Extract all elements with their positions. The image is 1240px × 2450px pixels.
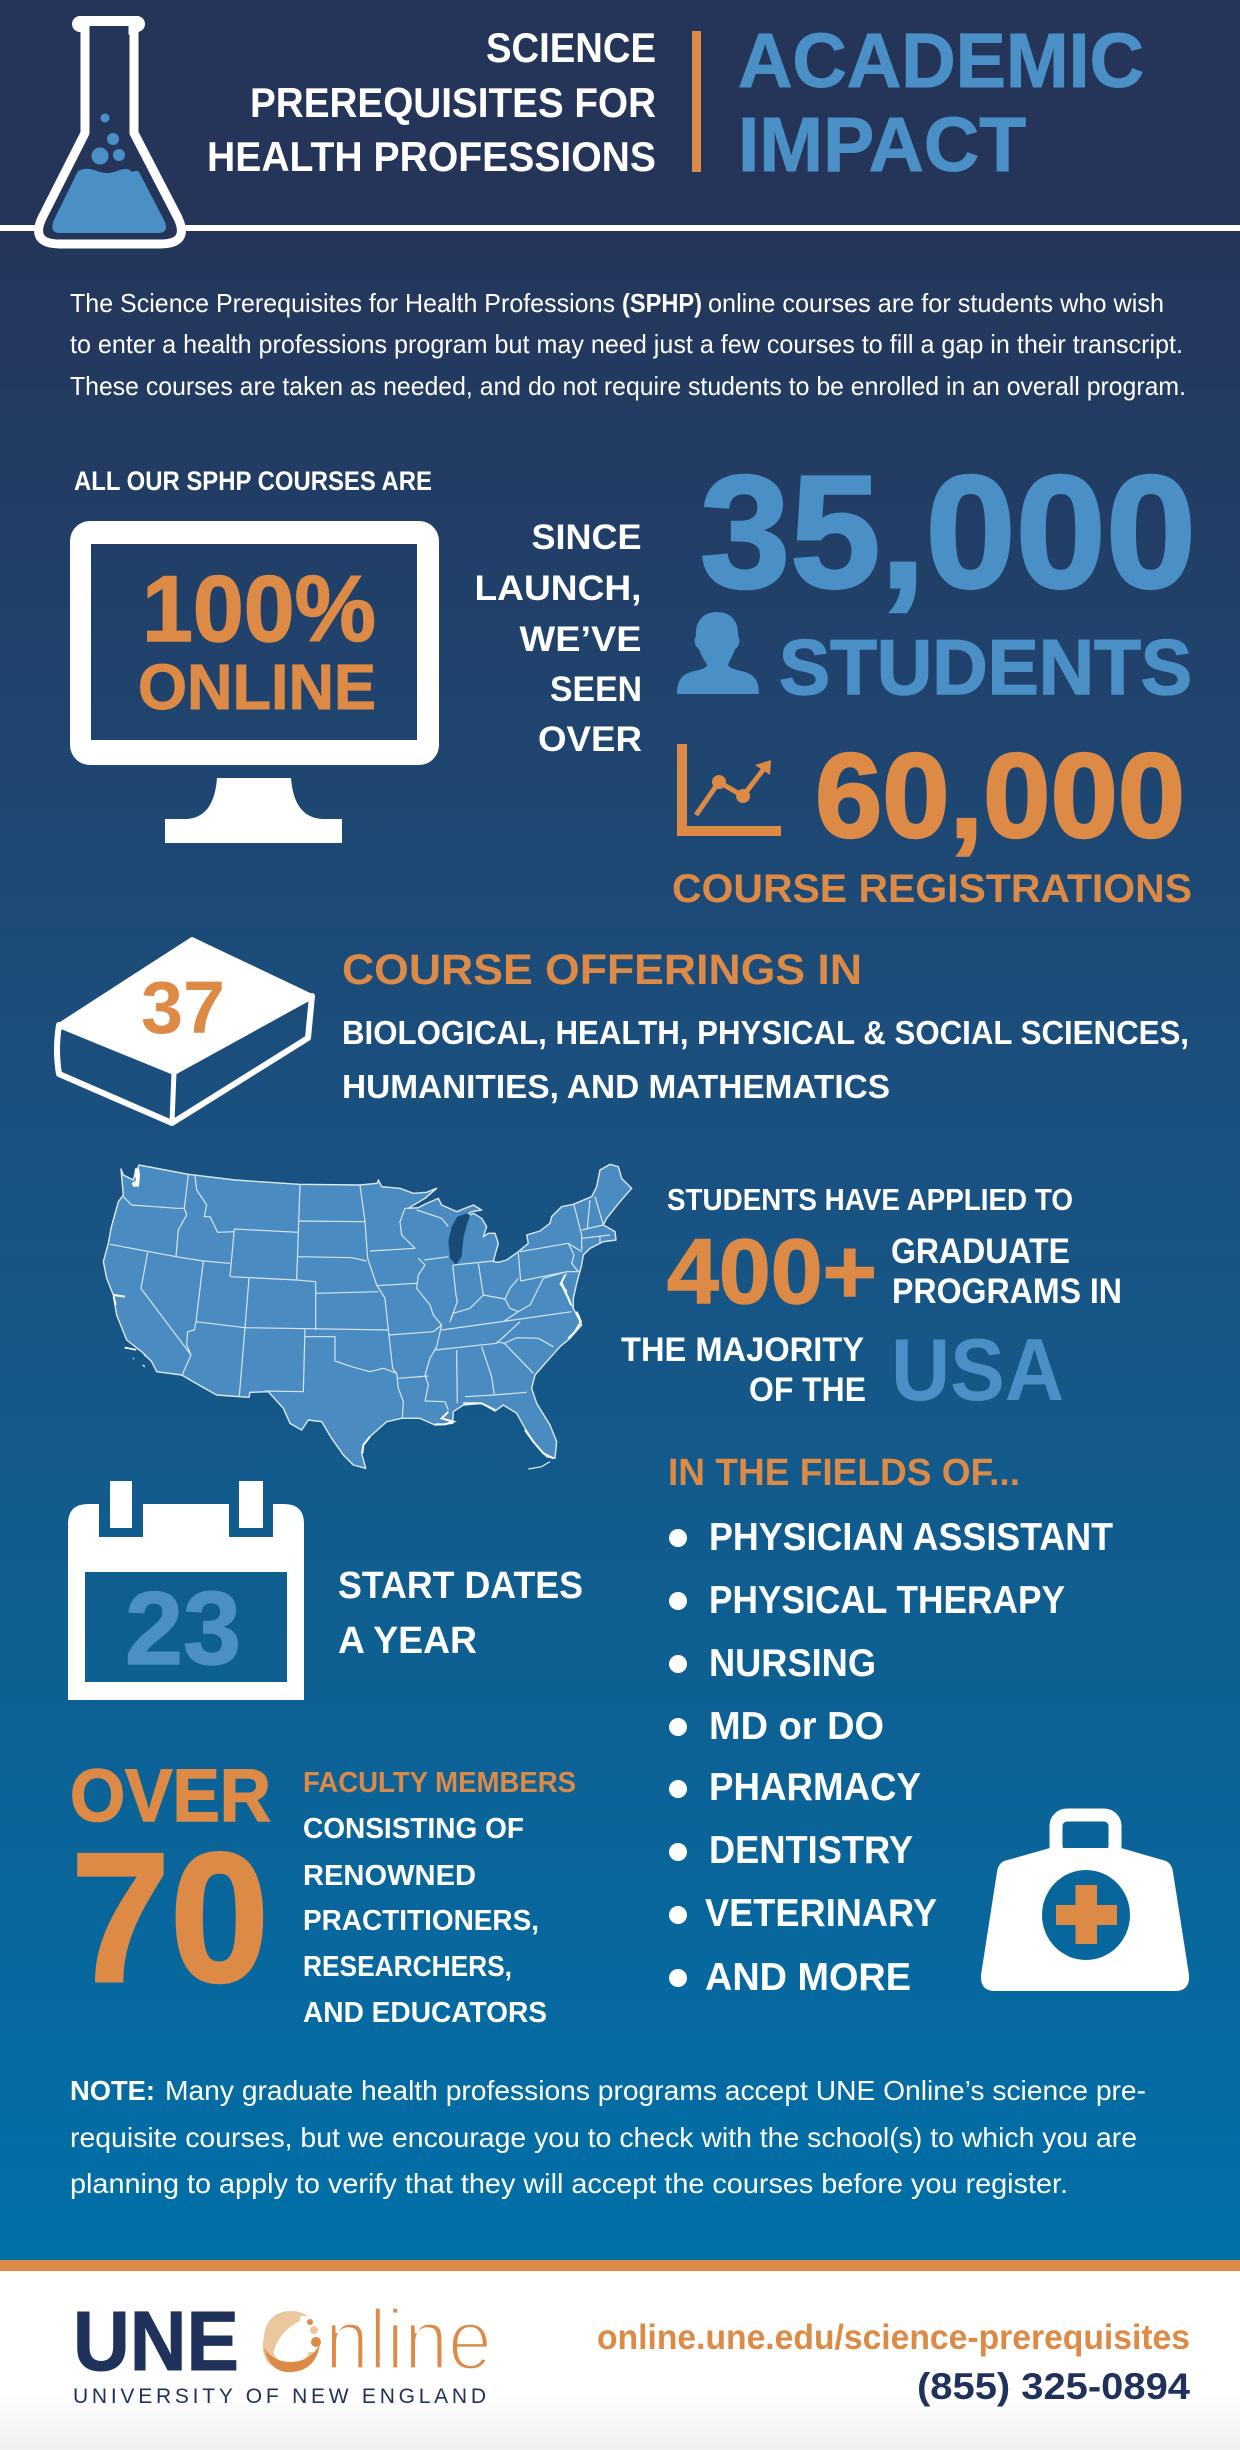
icon: line chart <box>677 744 781 836</box>
panel: graduate programs: OF THE <box>749 1371 866 1409</box>
list of fields: PHYSICAL THERAPY <box>709 1579 1065 1622</box>
panel: course offerings: HUMANITIES, AND MATHEMATICS <box>342 1068 890 1105</box>
list of fields: VETERINARY <box>705 1892 937 1935</box>
text: since launch we've seen over: LAUNCH, <box>474 569 642 608</box>
note text block: planning to apply to verify that they will accept the courses before you register. <box>70 2168 1068 2199</box>
list of fields <box>669 1516 1113 1999</box>
title: science prerequisites: HEALTH PROFESSIONS <box>207 133 656 180</box>
title: science prerequisites <box>207 24 656 180</box>
panel: fields list <box>668 1452 1113 1999</box>
title: science prerequisites: SCIENCE <box>486 24 656 71</box>
logo: UNE Online: UNIVERSITY OF NEW ENGLAND <box>73 2385 486 2408</box>
panel: start dates: A YEAR <box>338 1620 477 1662</box>
icon: calendar: 23 <box>125 1571 241 1687</box>
list of fields: AND MORE <box>705 1956 911 1999</box>
title: science prerequisites: PREREQUISITES FOR <box>250 79 656 126</box>
text: since launch we've seen over: OVER <box>538 720 642 759</box>
header banner <box>0 18 1240 244</box>
panel: graduate programs: STUDENTS HAVE APPLIED TO <box>667 1182 1073 1217</box>
icon: computer monitor <box>70 521 439 843</box>
intro text block: The Science Prerequisites for Health Professions <box>70 288 615 318</box>
text: since launch we've seen over: WE’VE <box>520 620 642 659</box>
panel: fields list: IN THE FIELDS OF... <box>668 1452 1020 1494</box>
logo: UNE Online: UNE <box>73 2294 239 2388</box>
intro text block <box>70 288 1186 401</box>
panel: faculty: OVER <box>70 1754 271 1837</box>
list of fields: DENTISTRY <box>709 1829 913 1872</box>
stat: 35,000 students: STUDENTS <box>779 623 1192 711</box>
note text block <box>70 2075 1146 2199</box>
icon: medical bag <box>981 1815 1189 1991</box>
logo: UNE Online <box>73 2293 492 2408</box>
logo: UNE Online: nline <box>325 2293 492 2388</box>
text: since launch we've seen over: SEEN <box>550 670 642 709</box>
title: academic impact: IMPACT <box>738 102 1026 188</box>
panel: graduate programs: THE MAJORITY <box>621 1331 864 1369</box>
panel: faculty <box>70 1754 576 2029</box>
panel: faculty: 70 <box>71 1814 269 2020</box>
icon: flask <box>39 24 181 244</box>
faculty description: RESEARCHERS, <box>303 1951 512 1983</box>
panel: graduate programs <box>621 1182 1122 1419</box>
panel: 100% online: ALL OUR SPHP COURSES ARE <box>74 466 432 496</box>
panel: graduate programs: USA <box>891 1320 1064 1419</box>
contact details: (855) 325-0894 <box>917 2366 1190 2407</box>
faculty description: PRACTITIONERS, <box>303 1905 539 1937</box>
intro text block: to enter a health professions program but may need just a few courses to fill a gap in their transcript. <box>70 329 1183 359</box>
intro text block: These courses are taken as needed, and do not require students to be enrolled in an overall program. <box>70 371 1186 401</box>
panel: graduate programs: 400+ <box>667 1221 877 1323</box>
title: academic impact <box>738 18 1144 188</box>
chart: map of the USA <box>103 1164 632 1469</box>
text: since launch we've seen over: SINCE <box>532 518 642 557</box>
icon: calendar <box>68 1481 304 1700</box>
faculty description: AND EDUCATORS <box>303 1997 547 2029</box>
logo mark: O with swoosh: O <box>260 2294 322 2388</box>
stat: 60,000 course registrations: COURSE REGISTRATIONS <box>672 867 1192 911</box>
list of fields: PHARMACY <box>709 1766 921 1809</box>
panel: start dates: START DATES <box>338 1565 583 1607</box>
icon: book <box>57 939 312 1123</box>
stat: 60,000 course registrations: 60,000 <box>815 729 1185 863</box>
panel: graduate programs: GRADUATE <box>891 1232 1070 1271</box>
panel: 100% online: 100% <box>142 556 376 661</box>
contact details: online.une.edu/science-prerequisites <box>597 2318 1190 2357</box>
stat: 35,000 students <box>677 442 1196 711</box>
intro text block: (SPHP) <box>622 288 702 318</box>
panel: 100% online <box>70 466 439 843</box>
panel: course offerings <box>57 939 1189 1123</box>
contact details <box>597 2318 1190 2407</box>
footer <box>0 2260 1240 2450</box>
icon: person <box>677 612 759 694</box>
stat: 35,000 students: 35,000 <box>700 442 1196 621</box>
panel: 100% online: ONLINE <box>138 651 376 723</box>
stat: 60,000 course registrations <box>672 729 1192 911</box>
panel: faculty: FACULTY MEMBERS <box>303 1767 576 1799</box>
note text block: requisite courses, but we encourage you to check with the school(s) to which you are <box>70 2122 1137 2153</box>
list of fields: PHYSICIAN ASSISTANT <box>709 1516 1113 1559</box>
panel: course offerings: BIOLOGICAL, HEALTH, PHYSICAL & SOCIAL SCIENCES, <box>342 1014 1189 1051</box>
faculty description: CONSISTING OF <box>303 1813 524 1845</box>
panel: course offerings: COURSE OFFERINGS IN <box>342 946 862 994</box>
panel: graduate programs: PROGRAMS IN <box>892 1272 1122 1311</box>
panel: start dates <box>68 1481 583 1700</box>
title: academic impact: ACADEMIC <box>738 18 1144 104</box>
faculty description: RENOWNED <box>303 1860 476 1892</box>
list of fields: NURSING <box>709 1642 876 1685</box>
intro text block: online courses are for students who wish <box>708 288 1164 318</box>
note text block: NOTE: <box>70 2075 155 2106</box>
text: since launch we've seen over <box>474 518 642 759</box>
list of fields: MD or DO <box>709 1705 884 1748</box>
icon: book: 37 <box>141 966 225 1049</box>
note text block: Many graduate health professions programs accept UNE Online’s science pre- <box>165 2075 1146 2106</box>
faculty description <box>303 1813 547 2029</box>
